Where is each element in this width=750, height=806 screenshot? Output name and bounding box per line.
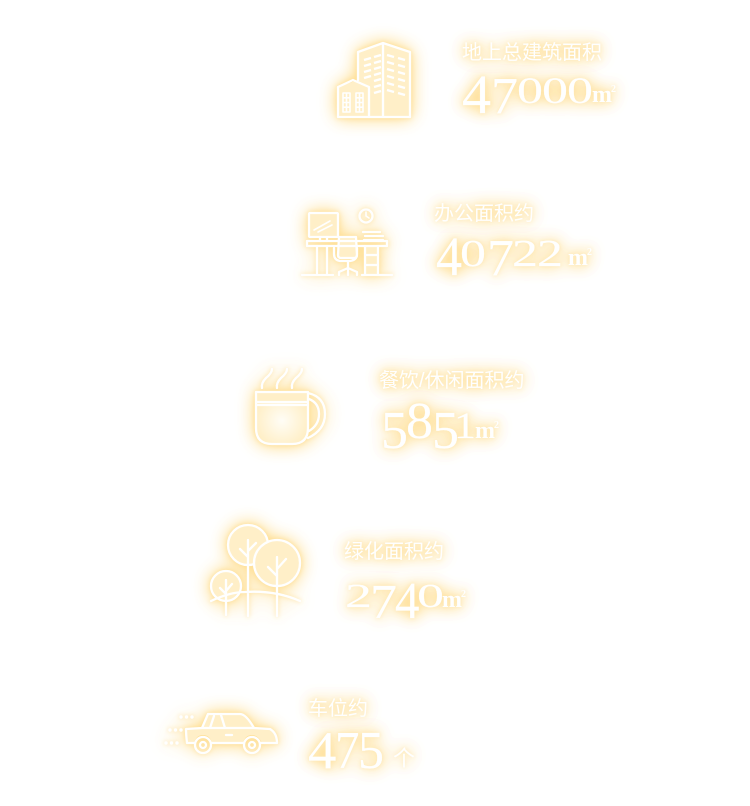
icon: coffee cup: [256, 369, 325, 444]
value: 5851 square metres: 1: [454, 405, 476, 446]
value: 47000 square metres: 2: [611, 84, 616, 95]
panel: green area: [211, 525, 466, 629]
value: 2740 square metres: m: [442, 587, 462, 613]
value: 47000 square metres: 4: [462, 65, 491, 126]
value: 5851 square metres: [381, 393, 499, 460]
heading: 办公面积约: 办公面积约: [434, 202, 534, 225]
value: 47000 square metres: 7: [491, 68, 518, 125]
value: 5851 square metres: m: [475, 418, 495, 444]
icon: trees: [211, 525, 300, 616]
panel: total above-ground floor area: [338, 41, 616, 126]
panel: office area: [302, 202, 592, 287]
value: 5851 square metres: 5: [432, 400, 459, 460]
value: 475 spaces: 5: [358, 721, 384, 780]
heading: 绿化面积约: 绿化面积约: [344, 540, 444, 563]
value: 2740 square metres: 0: [417, 577, 444, 615]
value: 40722 square metres: m: [568, 245, 588, 271]
value: 2740 square metres: 2: [345, 577, 372, 615]
value: 475 spaces: [308, 721, 415, 781]
value: 40722 square metres: 4: [436, 226, 462, 287]
heading: 餐饮/休闲面积约: 餐饮/休闲面积约: [379, 369, 525, 392]
value: 47000 square metres: m: [592, 82, 612, 108]
value: 40722 square metres: 7: [487, 230, 514, 287]
value: 5851 square metres: 2: [494, 420, 499, 431]
heading: 车位约: 车位约: [308, 697, 368, 720]
value: 47000 square metres: 0: [542, 70, 568, 111]
value: 5851 square metres: 5: [381, 400, 408, 460]
icon: office desk: [302, 210, 392, 275]
value: 2740 square metres: 2: [461, 589, 466, 600]
value: 5851 square metres: 8: [406, 393, 433, 450]
panel: dining and leisure area: [256, 369, 525, 460]
icon: buildings: [338, 43, 410, 117]
value: 475 spaces: 4: [308, 721, 336, 780]
value: 40722 square metres: [436, 226, 592, 287]
icon: car: [166, 713, 277, 753]
heading: 地上总建筑面积: 地上总建筑面积: [462, 41, 602, 64]
value: 40722 square metres: 2: [537, 232, 563, 274]
value: 2740 square metres: [345, 572, 466, 629]
value: 40722 square metres: 2: [512, 232, 538, 274]
value: 40722 square metres: 2: [587, 247, 592, 258]
value: 2740 square metres: 7: [370, 575, 397, 629]
value: 47000 square metres: [462, 65, 616, 126]
panel: parking spaces: [166, 697, 415, 781]
value: 475 spaces: 个: [393, 746, 415, 771]
value: 40722 square metres: 0: [460, 232, 486, 274]
value: 47000 square metres: 0: [517, 70, 543, 111]
value: 2740 square metres: 4: [395, 572, 419, 629]
value: 47000 square metres: 0: [567, 70, 593, 111]
value: 475 spaces: 7: [335, 722, 359, 781]
